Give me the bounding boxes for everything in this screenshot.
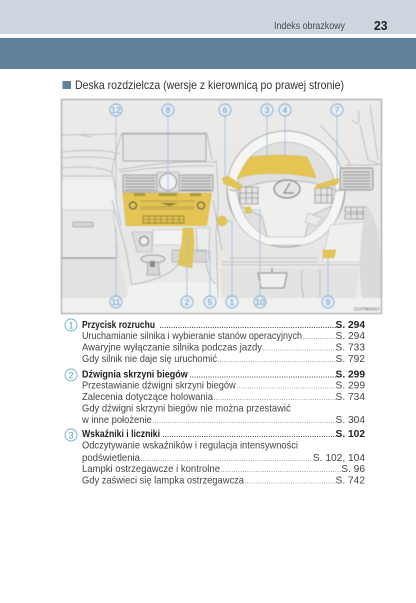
callout 4: 4 [283, 105, 288, 115]
callout 11 [110, 296, 122, 308]
centre panel controls [130, 193, 204, 223]
legend item 3: gauges: Gdy zaświeci się lampka ostrzegawcza [82, 476, 244, 486]
callout 9: 9 [326, 297, 331, 307]
callout 12: 12 [111, 105, 121, 115]
highlighted: instrument cluster [237, 155, 316, 179]
legend item 3: gauges: Wskaźniki i liczniki [82, 429, 160, 440]
callout 10 [254, 296, 266, 308]
section heading: Deska rozdzielcza (wersje z kierownicą po prawej stronie) [75, 78, 344, 92]
highlighted: right stalk [314, 178, 339, 189]
legend item 2: gear lever: S. 304 [336, 415, 365, 426]
legend item 2: gear lever: Dźwignia skrzyni biegów [82, 370, 188, 380]
callout 6 [219, 104, 231, 116]
legend item 2: gear lever: w inne położenie [81, 415, 152, 426]
section marker square [62, 81, 71, 89]
legend item 1: start button: Przycisk rozruchu [82, 320, 155, 331]
legend item 2: gear lever: Przestawianie dźwigni skrzyni biegów [82, 380, 236, 392]
legend item 2: gear lever: S. 734 [336, 392, 365, 403]
callout 3 [261, 104, 273, 116]
legend number 3 [65, 429, 77, 442]
callout 10: 10 [255, 297, 265, 307]
legend item 2: gear lever: Gdy dźwigni skrzyni biegów nie można przestawić [82, 404, 291, 414]
highlighted: centre panel [123, 193, 212, 226]
legend number 1: 1 [68, 320, 74, 332]
legend number 2 [65, 369, 77, 382]
highlighted: switch below dash [323, 250, 336, 258]
callout 1 [226, 296, 238, 308]
leader lines [116, 116, 337, 297]
callout 2 [181, 296, 193, 308]
blue section band [0, 38, 416, 69]
legend item 1: start button: Awaryjne wyłączanie silnika podczas jazdy [82, 342, 263, 354]
page number: 23 [374, 18, 388, 33]
callout 9 [322, 296, 334, 308]
legend item 3: gauges [65, 429, 365, 486]
legend item 1: start button: S. 792 [336, 354, 365, 365]
callout 4 [279, 104, 291, 116]
callout 7: 7 [335, 105, 340, 115]
legend item 2: gear lever: Zalecenia dotyczące holowania [82, 392, 213, 403]
legend item 3: gauges: S. 96 [341, 464, 365, 475]
header band [0, 0, 416, 34]
callout 8 [162, 104, 174, 116]
header title: Indeks obrazkowy [274, 21, 346, 32]
legend item 1: start button: S. 733 [336, 342, 365, 354]
highlighted: small switch [245, 207, 251, 213]
legend item 2: gear lever [65, 369, 365, 426]
legend item 1: start button: Gdy silnik nie daje się uruchomić [82, 354, 217, 365]
callout 1: 1 [230, 297, 235, 307]
legend item 1: start button: S. 294 [336, 331, 365, 342]
image code: CLYP8KX017 [354, 306, 380, 312]
legend item 2: gear lever: S. 299 [336, 370, 365, 380]
legend item 3: gauges: S. 742 [336, 476, 365, 486]
callout 6: 6 [223, 105, 228, 115]
highlighted: shift lever [178, 228, 194, 268]
legend item 1: start button: S. 294 [336, 320, 365, 331]
callout 2: 2 [185, 297, 190, 307]
dashboard line work [62, 105, 381, 313]
callout 5 [204, 296, 216, 308]
steering wheel [227, 131, 345, 247]
legend item 3: gauges: Lampki ostrzegawcze i kontrolne [82, 464, 220, 475]
callout 12 [110, 104, 122, 116]
legend item 3: gauges: Odczytywanie wskaźników i regulacja intensywności [82, 440, 298, 452]
callout 8: 8 [166, 105, 171, 115]
legend number 1 [65, 319, 77, 332]
legend item 1: start button [65, 319, 365, 365]
legend item 3: gauges: S. 102, 104 [313, 453, 365, 464]
callout 11: 11 [112, 297, 121, 307]
panel: dashboard diagram [62, 100, 382, 314]
legend item 3: gauges: S. 102 [336, 429, 365, 440]
highlighted: left stalk [222, 176, 242, 190]
highlighted: start button [217, 216, 227, 226]
legend item 3: gauges: podświetlenia [82, 453, 140, 464]
legend number 3: 3 [68, 430, 74, 442]
callout 7 [331, 104, 343, 116]
callout 3: 3 [265, 105, 270, 115]
legend item 1: start button: Uruchamianie silnika i wybieranie stanów operacyjnych [82, 331, 302, 342]
callout 5: 5 [208, 297, 213, 307]
legend number 2: 2 [68, 370, 74, 382]
legend item 2: gear lever: S. 299 [336, 380, 365, 392]
